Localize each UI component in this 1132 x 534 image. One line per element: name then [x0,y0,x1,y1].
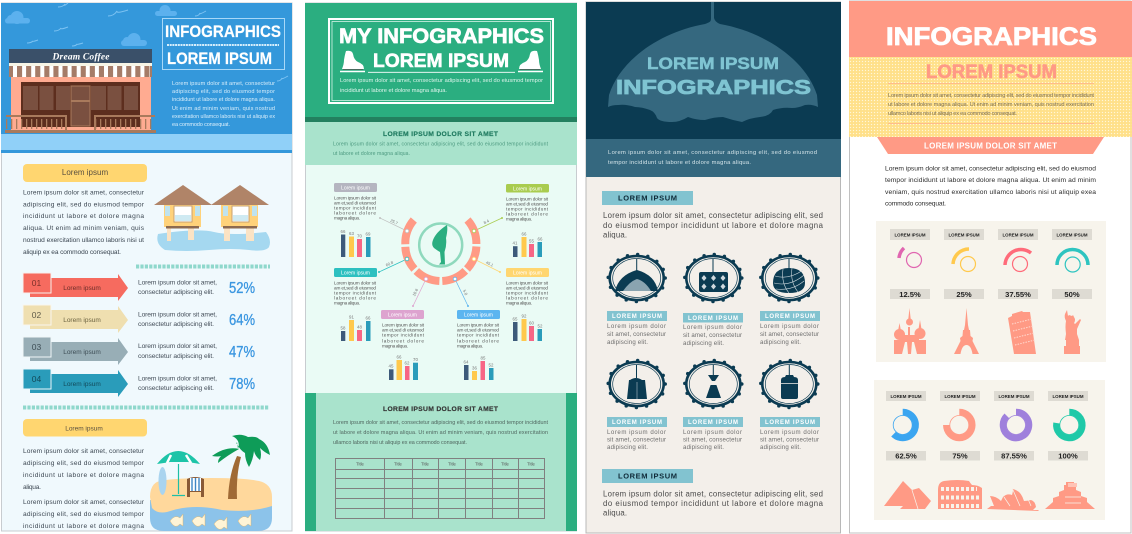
callout: middle left: Lorem ipsum [341,270,370,276]
callout: middle right [506,268,549,341]
callout: top left: Lorem ipsum [341,186,370,192]
section heading green [333,131,549,157]
text block 1: nostrud exercitation ullamco laboris nisi ut [23,237,144,244]
text block 1: aliqua. Ut enim ad minim veniam, quis [23,225,145,232]
text block 2 [23,448,145,530]
arrow row 04: 78% [229,376,255,393]
arrow row 03: Lorem ipsum [63,349,101,356]
callout: bottom left: 66 [397,354,402,360]
lamp caption 4: LOREM IPSUM [612,420,662,426]
donut 75% [940,391,980,460]
lamp caption 3: LOREM IPSUM [765,314,815,320]
lamp caption 6: Lorem ipsum dolor [760,429,819,436]
text block 2: incididunt ut labore et dolore magna [23,472,144,479]
data table: Title [421,462,430,466]
arrow row 02: Lorem ipsum [63,317,101,324]
lamp caption 1: LOREM IPSUM [612,314,662,320]
callout: bottom left: Lorem ipsum [388,312,417,318]
callout: middle right: tempor incididunt [506,290,549,296]
arrow row 04: consectetur adipiscing elit. [138,385,214,392]
lamp caption 2 [683,313,743,347]
icon: lamp medallion cone [685,360,742,408]
gauge 25%: 25% [956,290,972,299]
callout: bottom right: am et,sed di eiusmod [457,328,499,332]
card: arc gauges and monuments [876,221,1106,362]
text block lamp 1 [603,211,824,240]
lamp caption 1: Lorem ipsum dolor [607,323,666,330]
section label 2 [602,469,693,483]
callout: middle left [334,268,377,341]
connectors: 8.4 [483,218,491,225]
lamp caption 6: adipiscing elit. [760,444,801,451]
callout: top left: 70 [357,234,362,238]
heading pill 1 [23,164,147,182]
callout: bottom right: 85 [481,356,486,360]
callout: bottom right: magna aliqua. [457,344,483,348]
callout: middle left: 58 [341,326,346,330]
callout: bottom left: magna aliqua. [382,344,408,348]
text block 2: incididunt ut labore et dolore magna [23,523,144,530]
lamp caption 5: LOREM IPSUM [688,420,738,426]
gauge 37.55% [998,229,1038,299]
title frame [329,19,553,103]
connectors: 25.7 [390,218,399,226]
data table: Title [501,462,510,466]
callout: bottom left: am et,sed di eiusmod [382,328,424,332]
text block 2: adipiscing elit, sed do eiusmod tempor [23,460,145,467]
chart: central ring [405,220,476,281]
donut 62.5%: 62.5% [895,452,917,460]
callout: bottom left: tempor incididunt [382,332,425,338]
text block lamp 2: do eiusmod tempor incididunt ut labore et dolore magna [603,499,824,508]
arrow row 02: Lorem ipsum dolor sit amet, [138,312,217,318]
gauge 37.55%: LOREM IPSUM [1003,232,1034,238]
panel: dream coffee infographic [1,3,292,531]
icon: pyramids [884,481,931,509]
gauge 50% [1052,229,1092,299]
data table: Title [475,462,484,466]
callout: bottom left: Lorem ipsum dolor sit [382,322,425,328]
callout: top right: 66 [522,232,527,236]
callout: bottom left: 45 [389,364,394,369]
title frame: Lorem ipsum dolor sit amet, consectetur adipiscing elit, sed do eiusmod tempor [340,78,543,84]
donut 75%: 75% [952,452,968,460]
callout: middle left: 66 [366,316,371,320]
monument intro text: tempor incididunt ut labore et dolore magna aliqua. Ut enim ad minim [885,177,1096,184]
illustration: water huts [154,185,270,251]
illustration: hanging lamp: INFOGRAPHICS [616,76,811,99]
lamp caption 1 [607,311,667,346]
monument intro text: Lorem ipsum dolor sit amet, consectetur adipiscing elit, sed do eiusmod [885,166,1096,172]
title frame: MY INFOGRAPHICS [339,24,544,48]
text block 2: Lorem ipsum dolor sit amet, consectetur [23,499,145,506]
header paragraph: exercitation ullamco laboris nisi ut aliquip ex [172,114,275,120]
arrow row 03: consectetur adipiscing elit. [138,353,214,360]
lamp caption 1: adipiscing elit. [607,339,648,346]
callout: top left: am et,sed di eiusmod [334,200,376,206]
callout: middle right: laboreet dolore [506,296,548,300]
lamp intro text [608,150,817,166]
callout: top right: magna aliqua. [506,216,532,222]
arrow row 03: 47% [229,344,255,361]
title frame: LOREM IPSUM [373,51,509,72]
donut 100% [1048,391,1088,460]
illustration: hanging lamp [608,2,818,122]
text block lamp 1: aliqua. [603,230,627,240]
bottom section with table: Lorem ipsum dolor sit amet, consectetur adipiscing elit, sed do eiusmod tempor incididunt [333,420,548,426]
callout: top left: laboreet dolore [334,210,376,216]
data table [336,458,544,518]
lamp caption 4 [607,417,667,451]
callout: middle right: Lorem ipsum [513,270,542,276]
connectors: 60.8 [385,259,395,268]
callout: middle right: Lorem ipsum dolor sit [506,280,549,286]
callout: top right: 66 [538,236,543,242]
donut 62.5%: LOREM IPSUM [891,394,922,399]
arrow row 03 [23,337,255,365]
callout: bottom left: 62 [405,360,410,366]
callout: bottom right [457,310,500,380]
callout: top right [506,184,549,257]
donut 62.5% [886,391,926,460]
lamp caption 6: LOREM IPSUM [765,420,815,426]
data table: Title [527,462,536,466]
icon: statue of liberty [1064,310,1081,354]
callout: bottom right: 64 [464,360,469,364]
gauge 25% [944,229,984,299]
connectors: 18.8 [411,287,419,297]
callout: top left: Lorem ipsum dolor sit [334,196,377,200]
illustration: coffee shop: Dream Coffee [52,52,110,62]
lamp caption 3: adipiscing elit. [760,339,801,346]
connectors: 5.8 [462,289,469,297]
icon: lamp medallion trapezoid [608,360,665,408]
callout: middle left: 91 [349,314,354,320]
banner [877,137,1104,154]
callout: middle right: 52 [538,324,543,328]
arrow row 04 [23,369,255,397]
yellow intro text [888,84,1094,124]
monument intro text: commodo consequat. [885,200,946,208]
callout: top left: 63 [349,231,354,236]
lamp caption 6: sit amet, consectetur [760,436,819,444]
donut 87.55% [994,391,1034,460]
text block lamp 2: aliqua. [603,508,627,518]
callout: top right: 41 [513,240,518,246]
title box: INFOGRAPHICS [165,22,281,41]
callout: middle right: 92 [522,314,527,318]
arrow row 01: Lorem ipsum dolor sit amet, [138,280,217,286]
gauge 12.5% [890,229,930,299]
section label 1 [602,191,693,205]
arrow row 01: Lorem ipsum [63,285,101,292]
lamp caption 5 [683,417,743,451]
heading pill 2 [23,419,147,436]
text block 1 [23,190,145,256]
heading pill 1: Lorem ipsum [62,168,108,177]
arrow row 03: Lorem ipsum dolor sit amet, [138,343,217,350]
data table: Title [356,462,365,466]
title: LOREM IPSUM [926,62,1057,83]
arrow row 02: 64% [229,312,255,329]
callout: middle left: laboreet dolore [334,296,376,300]
gauge 50%: 50% [1064,290,1080,299]
bottom section with table: ut labore et dolore magna aliqua. Ut enim ad minim veniam, quis nostrud exercitation [333,430,548,436]
monument intro text: veniam, quis nostrud exercitation ullamco laboris nisi ut aliquip exea [885,189,1096,196]
icon: leaning tower [1008,311,1036,354]
callout: middle right: magna aliqua. [506,300,532,306]
title frame: incididunt ut labore et dolore magna aliqua. [340,88,447,94]
gauge 12.5%: LOREM IPSUM [895,232,926,238]
callout: top left: 69 [366,232,371,236]
connectors [378,217,503,307]
section heading green: Lorem ipsum dolor sit amet, consectetur adipiscing elit, sed do eiusmod tempor incididunt [333,142,549,148]
lamp caption 3: Lorem ipsum dolor [760,323,819,330]
callout: bottom left [381,310,425,380]
title [886,23,1097,83]
callout: top left: tempor incididunt [334,206,377,210]
data table: Title [394,462,403,466]
callout: middle left: magna aliqua. [334,300,360,306]
card: donut gauges and monuments [874,380,1105,520]
illustration: beach island [150,435,272,531]
icon: colosseum [938,480,982,509]
gauge 37.55%: 37.55% [1005,290,1031,299]
lamp caption 4: sit amet, consectetur [607,436,666,444]
arrow row 01 [23,273,255,301]
donut 87.55%: LOREM IPSUM [999,394,1030,399]
title box: LOREM IPSUM [167,49,272,68]
header paragraph: ea commodo consequat. [172,122,230,128]
bottom section with table: ullamco laboris nisi ut aliquip ex ea commodo consequat. [333,440,467,446]
gauge 50%: LOREM IPSUM [1057,232,1088,238]
callout: bottom right: Lorem ipsum dolor sit [457,322,500,328]
callout: top left: 66 [341,229,346,234]
callout: middle right: am et,sed di eiusmod [506,286,548,290]
heading pill 2: Lorem ipsum [65,426,103,432]
lamp caption 5: sit amet, consectetur [683,436,742,444]
callout: middle right: 60 [529,320,534,326]
callout: bottom right: tempor incididunt [457,332,500,338]
callout: top right: laboreet dolore [506,212,548,216]
panel: lamp infographic [586,2,841,533]
header paragraph [172,81,275,128]
callout: top left [334,183,377,257]
text block 1: aliquip ex ea commodo consequat. [23,249,121,256]
donut 100%: LOREM IPSUM [1053,394,1084,399]
callout: bottom right: laboreet dolore [457,338,499,344]
icon: skate right [518,51,543,72]
arrow row 04: 04 [32,374,41,384]
icon: lamp medallion patterned box [685,254,742,302]
icon: mayan pyramid [1045,482,1095,509]
panel: monuments infographic [849,1,1132,533]
icon: lamp medallion dome [608,254,665,302]
arrow row 03: 03 [32,342,41,352]
arrow row 01: 52% [229,280,255,297]
section heading green: LOREM IPSUM DOLOR SIT AMET [383,131,499,138]
bottom section with table: LOREM IPSUM DOLOR SIT AMET [383,406,499,413]
callout: top right: 55 [529,238,534,244]
callout: bottom left: laboreet dolore [382,338,424,344]
lamp caption 1: sit amet, consectetur [607,331,666,338]
text block 2: Lorem ipsum dolor sit amet, consectetur [23,448,145,455]
text block lamp 1: do eiusmod tempor incididunt ut labore et dolore magna [603,221,824,230]
data table: Title [448,462,457,466]
callout: middle left: 48 [357,324,362,330]
lamp caption 4: Lorem ipsum dolor [607,429,666,436]
callout: bottom right: 52 [489,362,494,368]
title: INFOGRAPHICS [886,23,1097,51]
callout: top right: Lorem ipsum dolor sit [506,196,549,202]
lamp caption 3: sit amet, consectetur [760,331,819,338]
donut 75%: LOREM IPSUM [945,394,976,399]
callout: middle right: 65 [513,316,518,322]
icon: skate left [340,51,365,72]
lamp caption 2: sit amet, consectetur [683,332,742,339]
yellow intro text: ut labore et dolore magna aliqua. Ut enim ad minim veniam, quis nostrud exercitation [888,102,1094,108]
clouds and birds [5,3,288,81]
gauge 25%: LOREM IPSUM [949,232,980,238]
icon: saint basil [894,308,926,354]
arrow row 02: consectetur adipiscing elit. [138,321,214,328]
icon: lamp medallion ball [761,254,818,302]
connectors: 45.1 [485,260,495,268]
callout: bottom left: 70 [413,357,418,362]
arrow row 01: consectetur adipiscing elit. [138,289,214,296]
section heading green: ut labore et dolore magna aliqua. [333,151,410,157]
lamp caption 5: Lorem ipsum dolor [683,429,742,436]
bottom section with table [305,393,577,531]
lamp intro text: Lorem ipsum dolor sit amet, consectetur adipiscing elit, sed do eiusmod [608,150,817,156]
header paragraph: Ut enim ad minim veniam, quis nostrud [172,106,275,112]
illustration: coffee shop [5,49,156,133]
callout: bottom right: Lorem ipsum [464,312,493,318]
text block 1: incididunt ut labore et dolore magna [23,213,144,220]
donut 87.55%: 87.55% [1001,452,1027,460]
arrow row 04: Lorem ipsum dolor sit amet, [138,376,217,382]
callout: top right: am et,sed di eiusmod [506,202,548,206]
illustration: hanging lamp: LOREM IPSUM [647,54,779,73]
banner: LOREM IPSUM DOLOR SIT AMET [924,142,1057,150]
lamp caption 3 [760,311,820,346]
yellow intro text: ullamco laboris nisi ut aliquip ex ea commodo consequat. [888,111,1017,117]
text block 1: Lorem ipsum dolor sit amet, consectetur [23,190,145,196]
lamp caption 6 [760,417,820,451]
title box [162,18,284,70]
lamp caption 2: adipiscing elit. [683,340,724,347]
section label 2: LOREM IPSUM [618,472,677,480]
lamp caption 5: adipiscing elit. [683,444,724,451]
header paragraph: incididunt ut labore et dolore magna aliqua. [172,97,275,103]
icon: sydney opera house [987,489,1039,511]
text block lamp 1: Lorem ipsum dolor sit amet, consectetur adipiscing elit, sed [603,211,823,220]
text block lamp 2: Lorem ipsum dolor sit amet, consectetur adipiscing elit, sed [603,490,823,498]
lamp caption 4: adipiscing elit. [607,444,648,451]
arrow row 04: Lorem ipsum [63,381,101,388]
callout: top right: Lorem ipsum [513,186,542,192]
gauge 12.5%: 12.5% [899,290,921,299]
section label 1: LOREM IPSUM [618,194,677,202]
header paragraph: Lorem ipsum dolor sit amet, consectetur [172,81,275,87]
icon: eiffel tower [954,308,979,354]
text block 2: aliqua. [23,484,41,491]
callout: top right: tempor incididunt [506,206,549,212]
callout: middle left: tempor incididunt [334,290,377,296]
panel: my infographics green [305,3,577,531]
monument intro text [885,166,1096,208]
text block 2: adipiscing elit, sed do eiusmod tempor [23,511,145,518]
callout: middle left: Lorem ipsum dolor sit [334,280,377,286]
lamp caption 2: Lorem ipsum dolor [683,324,742,331]
callout: top left: magna aliqua. [334,216,360,220]
text block lamp 2 [603,490,824,518]
arrow row 02 [23,305,255,333]
arrow row 01: 01 [32,278,41,288]
icon: lamp medallion cylinder [761,360,818,408]
donut 100%: 100% [1058,452,1078,460]
yellow intro text: Lorem ipsum dolor sit amet, consectetur adipiscing elit, sed do eiusmod tempor incididunt [888,93,1094,99]
callout: bottom right: 36 [472,366,477,370]
lamp caption 2: LOREM IPSUM [688,316,738,322]
arrow row 02: 02 [32,310,41,320]
header paragraph: adipiscing elit, sed do eiusmod tempor [172,89,275,95]
lamp intro text: tempor incididunt ut labore et dolore magna aliqua. [608,160,751,166]
text block 1: adipiscing elit, sed do eiusmod tempor [23,202,145,208]
callout: middle left: am et,sed di eiusmod [334,286,376,290]
